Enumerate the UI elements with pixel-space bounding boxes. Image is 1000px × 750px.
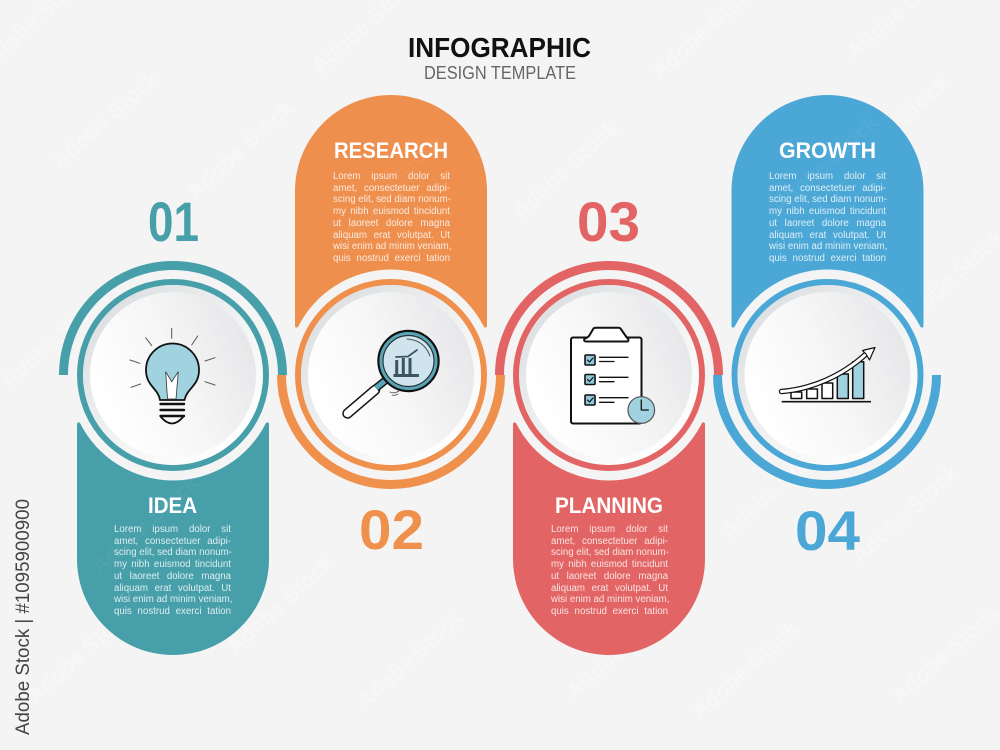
watermark pattern: Adobe Stock: [687, 615, 804, 724]
body text: idea: amet, consectetuer adipi-: [114, 536, 231, 547]
body text: planning: aliquam erat volutpat. Ut: [551, 583, 668, 594]
body text: research: ut laoreet dolore magna: [333, 218, 450, 229]
watermark pattern: Adobe Stock: [847, 460, 964, 569]
watermark overlay: Adobe Stock: [767, 110, 884, 219]
watermark pattern: Adobe Stock: [717, 435, 834, 544]
body text: growth: amet, consectetuer adipi-: [769, 183, 886, 194]
body text: planning: amet, consectetuer adipi-: [551, 536, 668, 547]
body text: research: amet, consectetuer adipi-: [333, 183, 450, 194]
body text: planning: quis nostrud exerci tation: [551, 606, 668, 617]
body text: planning: scing elit, sed diam nonum-: [551, 547, 669, 558]
panel: planning: [513, 422, 705, 655]
watermark overlay: Adobe Stock: [547, 500, 664, 609]
body text: planning: wisi enim ad minim veniam,: [551, 594, 669, 605]
watermark pattern: Adobe Stock: [837, 70, 954, 179]
watermark overlay: Adobe Stock: [341, 125, 448, 245]
icon: growth chart with arrow: [782, 348, 875, 402]
circle: growth: [734, 282, 920, 468]
circle: idea: [80, 282, 266, 468]
watermark overlay: [87, 95, 884, 609]
icon: magnifier with chart: [348, 331, 438, 414]
circle: research: [298, 282, 484, 468]
body text: idea: my nibh euismod tincidunt: [114, 559, 231, 570]
body text: research: wisi enim ad minim veniam,: [333, 241, 451, 252]
body text: research: Lorem ipsum dolor sit: [333, 171, 450, 182]
title: INFOGRAPHIC: [408, 32, 591, 63]
outer arc orange: [282, 375, 500, 484]
step 03: planning: [500, 190, 718, 655]
watermark pattern: Adobe Stock: [22, 600, 139, 709]
body text: growth: [769, 171, 887, 267]
number 01: 01: [148, 190, 199, 253]
stock id label: Adobe Stock | #1095900900: [13, 499, 34, 735]
watermark pattern: Adobe Stock: [507, 115, 624, 224]
body text: growth: aliquam erat volutpat. Ut: [769, 230, 886, 241]
icon: clipboard with clock: [571, 328, 655, 424]
body text: idea: scing elit, sed diam nonum-: [114, 547, 232, 558]
heading: growth: GROWTH: [779, 138, 876, 163]
heading: planning: PLANNING: [555, 493, 663, 518]
watermark pattern: Adobe Stock: [887, 600, 1000, 709]
outer arc red: [500, 265, 718, 375]
body text: idea: ut laoreet dolore magna: [114, 571, 231, 582]
watermark overlay: Adobe Stock: [87, 470, 204, 579]
watermark pattern: Adobe Stock: [562, 595, 679, 704]
body text: growth: Lorem ipsum dolor sit: [769, 171, 886, 182]
title: [408, 32, 591, 83]
panel: research: [295, 95, 487, 328]
body text: growth: ut laoreet dolore magna: [769, 218, 886, 229]
body text: idea: Lorem ipsum dolor sit: [114, 524, 231, 535]
body text: growth: scing elit, sed diam nonum-: [769, 194, 887, 205]
body text: growth: quis nostrud exerci tation: [769, 253, 886, 264]
watermark pattern: Adobe Stock: [0, 285, 114, 394]
body text: planning: [551, 524, 669, 620]
number 02: 02: [359, 498, 424, 561]
body text: idea: aliquam erat volutpat. Ut: [114, 583, 231, 594]
step 01: idea: [64, 190, 282, 655]
heading: idea: IDEA: [148, 493, 197, 518]
watermark pattern: Adobe Stock: [222, 550, 339, 659]
panel: growth: [732, 95, 924, 328]
outer arc blue: [718, 375, 936, 484]
body text: research: aliquam erat volutpat. Ut: [333, 230, 450, 241]
outer arc teal: [64, 265, 282, 375]
body text: planning: Lorem ipsum dolor sit: [551, 524, 668, 535]
step 02: research: [282, 95, 500, 561]
watermark pattern: Adobe Stock: [47, 65, 164, 174]
step 04: growth: [718, 95, 936, 562]
body text: idea: [114, 524, 232, 620]
panel: idea: [77, 422, 269, 655]
body text: idea: wisi enim ad minim veniam,: [114, 594, 232, 605]
body text: research: [333, 171, 451, 267]
body text: research: quis nostrud exerci tation: [333, 253, 450, 264]
subtitle: DESIGN TEMPLATE: [424, 63, 576, 83]
circle: planning: [516, 282, 702, 468]
body text: planning: my nibh euismod tincidunt: [551, 559, 668, 570]
number 03: 03: [577, 190, 640, 253]
body text: idea: quis nostrud exerci tation: [114, 606, 231, 617]
icon: light bulb: [130, 328, 215, 424]
body text: research: scing elit, sed diam nonum-: [333, 194, 451, 205]
watermark overlay: Adobe Stock: [182, 95, 299, 204]
body text: growth: my nibh euismod tincidunt: [769, 206, 886, 217]
number 04: 04: [795, 499, 860, 562]
body text: planning: ut laoreet dolore magna: [551, 571, 668, 582]
body text: growth: wisi enim ad minim veniam,: [769, 241, 887, 252]
watermark pattern: Adobe Stock: [352, 605, 469, 714]
body text: research: my nibh euismod tincidunt: [333, 206, 450, 217]
heading: research: RESEARCH: [334, 138, 448, 163]
watermark pattern: Adobe Stock: [182, 95, 299, 204]
